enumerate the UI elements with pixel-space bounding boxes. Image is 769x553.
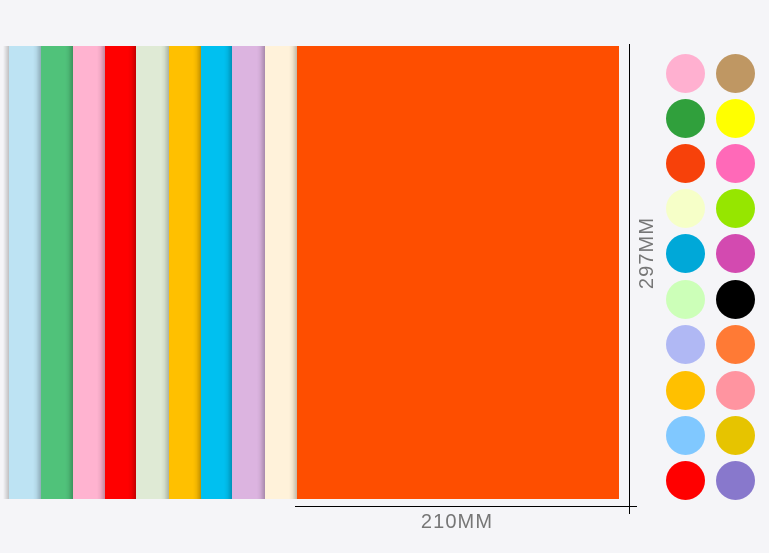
swatch: lime	[716, 189, 755, 228]
label: height 297MM: 297MM	[636, 217, 658, 289]
swatch: black	[716, 280, 755, 319]
colour swatches	[666, 54, 755, 500]
label: width 210MM: 210MM	[421, 511, 493, 533]
swatch: pink	[666, 54, 705, 93]
sheet: front orange	[297, 46, 619, 499]
swatch: pale green	[666, 280, 705, 319]
sheet: sky blue	[201, 46, 232, 499]
sheet: amber	[169, 46, 201, 499]
sheet: lilac	[232, 46, 265, 499]
sheet: pink	[73, 46, 105, 499]
swatch: tan	[716, 54, 755, 93]
swatch: hot pink	[716, 144, 755, 183]
swatch: cyan blue	[666, 234, 705, 273]
sheet: pale green	[136, 46, 169, 499]
swatch: green	[666, 99, 705, 138]
swatch: purple	[716, 461, 755, 500]
swatch: yellow	[716, 99, 755, 138]
swatch: salmon pink	[716, 371, 755, 410]
width dimension line	[295, 506, 637, 507]
swatch: amber	[666, 371, 705, 410]
swatch: orange red	[666, 144, 705, 183]
panel: stacked paper sheets	[4, 46, 619, 499]
swatch: mustard	[716, 416, 755, 455]
swatch: orange	[716, 325, 755, 364]
height dimension line	[629, 44, 630, 514]
sheet: cream	[265, 46, 297, 499]
swatch: light blue	[666, 416, 705, 455]
sheet: red	[105, 46, 136, 499]
swatch: pale yellow	[666, 189, 705, 228]
sheet: green	[41, 46, 73, 499]
sheet: light blue	[9, 46, 41, 499]
first sheet left shadow	[3, 46, 9, 499]
swatch: red	[666, 461, 705, 500]
swatch: periwinkle	[666, 325, 705, 364]
swatch: magenta	[716, 234, 755, 273]
